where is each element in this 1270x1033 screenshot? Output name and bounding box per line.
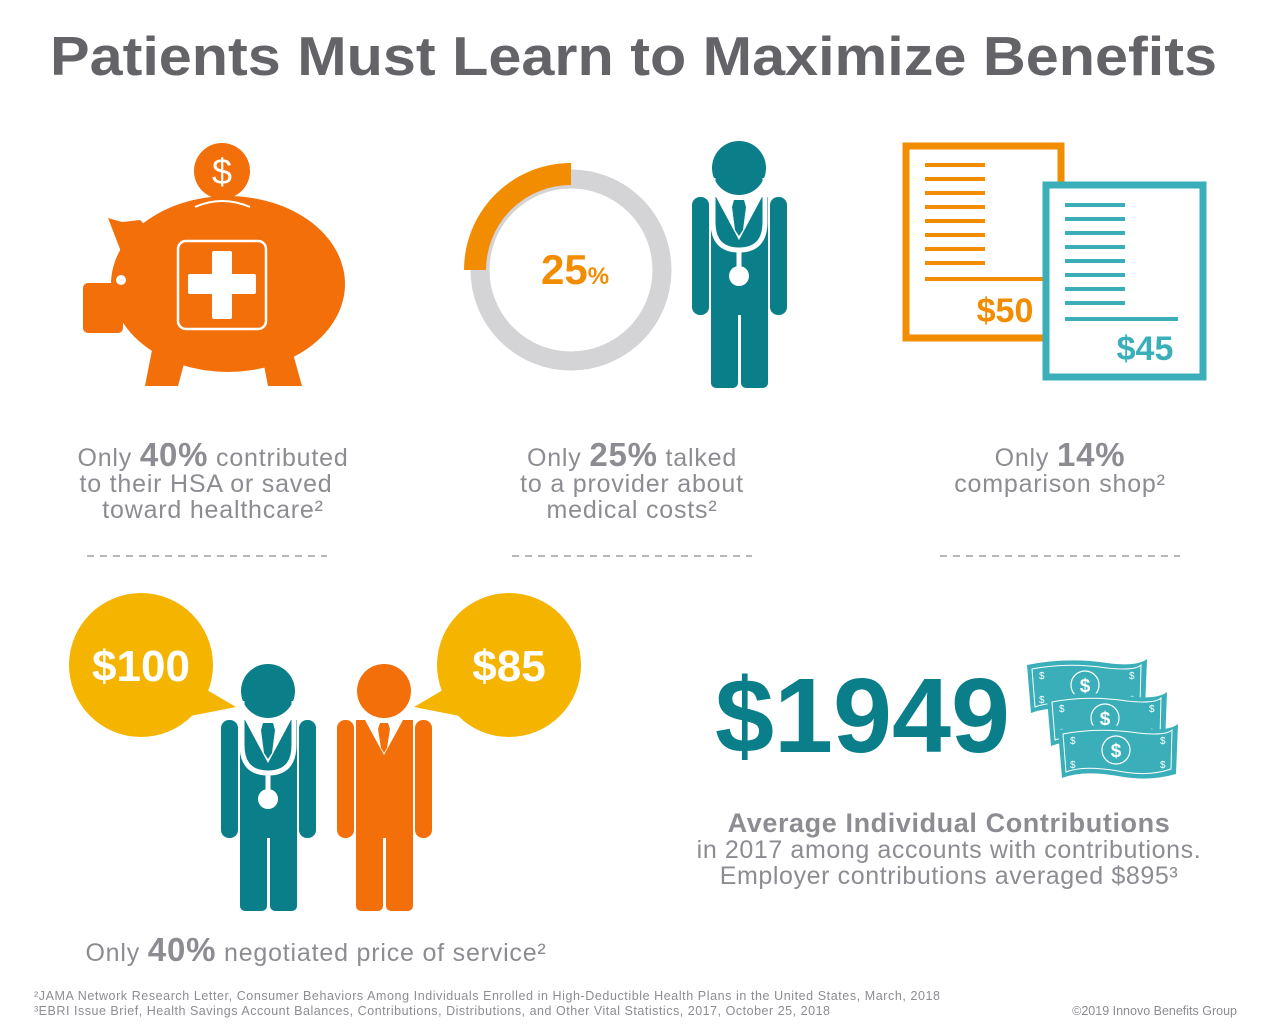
callout: $100 bubble: $100 [92,642,190,691]
text: contributions description: Average Individual Contributions [728,808,1170,838]
text: stat 40% HSA: to their HSA or saved [79,470,333,498]
chart: donut 25%: 25% [541,246,609,293]
icon: money bills [1027,659,1178,779]
callout: $85 bubble [414,593,581,737]
text: stat 40% HSA: Only 40% contributed [77,436,349,473]
icon: price documents: $45 [1117,330,1173,368]
text: stat 25%: Only 25% talked [527,436,737,473]
text: stat 40% HSA: toward healthcare² [102,496,324,524]
icon: piggy bank [83,143,345,386]
icon: piggy bank: $ [212,151,232,192]
text: stat 14%: Only 14% [995,436,1125,473]
chart: donut 25% [475,174,662,361]
text: stat 25%: medical costs² [547,496,717,524]
footer: sources: ³EBRI Issue Brief, Health Savings Account Balances, Contributions, Distributions, and Other Vital Statistics, 2017, October 25, 2018 [34,1004,830,1018]
icon: price documents [906,146,1203,377]
title: Patients Must Learn to Maximize Benefits [50,25,1217,87]
text: stat 25%: to a provider about [520,470,744,498]
text: stat 14%: comparison shop² [954,470,1166,498]
footer: copyright: ©2019 Innovo Benefits Group [1072,1004,1237,1018]
icon: doctor [692,141,787,388]
footer: sources: ²JAMA Network Research Letter, Consumer Behaviors Among Individuals Enrolled in High-Deductible Health Plans in the United States, March, 2018 [34,989,940,1003]
big number $1949: $1949 [715,657,1010,775]
icon: doctor negotiating [221,664,316,911]
callout: $85 bubble: $85 [472,642,546,691]
text: contributions description: in 2017 among accounts with contributions. [697,836,1201,864]
callout: $100 bubble [69,593,236,737]
text: contributions description: Employer contributions averaged $895³ [720,862,1178,890]
text: stat 40% negotiated: Only 40% negotiated price of service² [85,931,547,968]
icon: price documents: $50 [977,292,1033,330]
icon: patient [337,664,432,911]
